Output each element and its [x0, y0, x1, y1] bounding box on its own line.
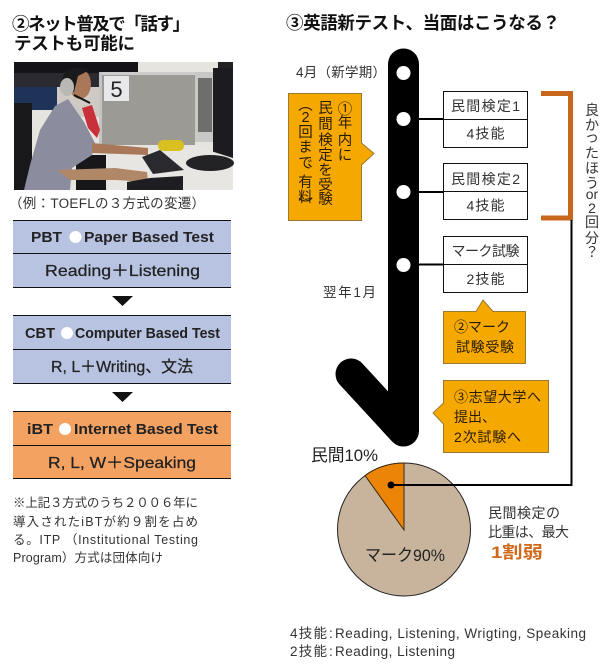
panel: PBT: PBT — [31, 230, 62, 246]
legend: skills: 2技能 — [290, 644, 328, 659]
callout 1: 民 — [318, 101, 333, 117]
callout 1: ︑ — [298, 164, 313, 180]
connector line to pie — [388, 220, 572, 488]
panel: CBT: Computer Based Test — [75, 326, 220, 342]
chart: timeline pole — [351, 64, 410, 431]
vertical note: う — [585, 175, 599, 191]
photo: test taker at computer: 5 — [110, 77, 123, 102]
callout 1: 間 — [318, 117, 333, 133]
callout 1: 定 — [318, 147, 333, 164]
heading: section 2: ②ネット普及で「話す」 — [12, 14, 190, 34]
callout 3 — [433, 380, 548, 452]
caption: （例：TOEFLの３方式の変遷） — [9, 196, 205, 211]
legend: skills: 4技能 — [290, 626, 328, 641]
legend: skills: : — [329, 626, 333, 641]
legend: skills: : — [329, 644, 333, 659]
box: private test 2 — [419, 164, 528, 220]
callout 1: 受 — [318, 177, 333, 194]
panel: CBT: R, L＋Writing、文法 — [51, 358, 193, 376]
vertical note: 2 — [588, 200, 596, 216]
callout 2: 試験受験 — [456, 339, 514, 355]
callout 3: 2次試験へ — [454, 429, 521, 445]
vertical note: 分 — [585, 230, 599, 246]
legend: skills: Reading, Listening, Wrigting, Speaking — [335, 626, 586, 641]
panel: iBT: Internet Based Test — [74, 422, 218, 438]
note: weight of private tests: 1割弱 — [491, 543, 543, 562]
callout 1: 検 — [318, 132, 333, 149]
callout 3: ③志望大学へ — [454, 389, 541, 405]
footnote: ※上記３方式のうち２００６年に — [13, 495, 198, 510]
callout 1: に — [338, 148, 352, 164]
pie chart — [338, 463, 470, 596]
note: weight of private tests: 民間検定の — [488, 505, 560, 521]
footnote: る。ITP （Institutional Testing — [13, 533, 198, 547]
callout 3: 提出、 — [454, 409, 496, 425]
vertical note: ほ — [585, 160, 599, 176]
callout 1: で — [298, 156, 313, 172]
callout 1: 内 — [338, 132, 352, 149]
legend: skills — [290, 626, 586, 659]
vertical note: か — [585, 117, 599, 133]
bracket — [541, 94, 570, 218]
footnote: 導入されたiBTが約９割を占め — [13, 514, 198, 529]
vertical note: 回 — [585, 214, 599, 230]
callout 1: を — [318, 162, 333, 179]
label: private share: 民間10% — [311, 446, 378, 465]
legend: skills: Reading, Listening — [335, 644, 455, 659]
panel: CBT — [13, 316, 231, 384]
vertical note: た — [585, 145, 599, 161]
footnote: Program）方式は団体向け — [13, 550, 163, 565]
callout 1: 年 — [338, 115, 352, 132]
callout 1: 料 — [298, 189, 313, 206]
box: private test 1 — [419, 92, 528, 148]
panel: PBT: Reading＋Listening — [45, 263, 200, 280]
box: private test 2: 4技能 — [466, 198, 504, 214]
arrow: PBT to CBT — [112, 296, 133, 306]
box: private test 1: 4技能 — [466, 126, 504, 142]
box: mark exam — [419, 236, 528, 292]
vertical note: 良 — [585, 102, 599, 118]
callout 1: 験 — [318, 191, 333, 208]
vertical note: ？ — [585, 244, 599, 260]
panel: PBT — [13, 220, 231, 288]
panel: PBT: Paper Based Test — [84, 230, 214, 246]
pie chart: マーク90% — [365, 546, 445, 565]
panel: iBT — [13, 412, 231, 478]
callout 2 — [444, 300, 526, 364]
panel: CBT: CBT — [25, 326, 55, 342]
heading: section 2 — [12, 14, 190, 54]
heading: section 3: ③英語新テスト、当面はこうなる？ — [286, 13, 560, 33]
note: weight of private tests — [488, 505, 569, 562]
label: January: 翌年1月 — [323, 285, 376, 300]
photo: test taker at computer — [14, 62, 234, 190]
panel: iBT: R, L, W＋Speaking — [48, 455, 196, 472]
note: weight of private tests: 比重は、最大 — [488, 524, 569, 540]
panel: iBT: iBT — [27, 422, 53, 438]
vertical note — [585, 102, 599, 260]
callout 1: 2 — [301, 110, 310, 126]
callout 1: 回 — [298, 124, 313, 141]
callout 1 — [288, 94, 374, 220]
callout 1: ︵ — [298, 98, 313, 114]
heading: section 2: テストも可能に — [14, 34, 135, 54]
vertical note: or — [586, 186, 599, 202]
box: private test 1: 民間検定1 — [451, 98, 520, 114]
footnote — [13, 495, 198, 565]
callout 1: ① — [338, 101, 352, 118]
vertical note: っ — [585, 129, 599, 145]
callout 1: 有 — [298, 174, 313, 191]
callout 2: ②マーク — [454, 319, 510, 335]
box: mark exam: 2技能 — [466, 271, 504, 287]
box: mark exam: マーク試験 — [452, 243, 520, 259]
label: April: 4月（新学期） — [296, 65, 386, 80]
callout 1: ︶ — [298, 197, 313, 214]
callout 1: ま — [298, 140, 313, 156]
arrow: CBT to iBT — [112, 392, 133, 402]
box: private test 2: 民間検定2 — [451, 171, 520, 187]
